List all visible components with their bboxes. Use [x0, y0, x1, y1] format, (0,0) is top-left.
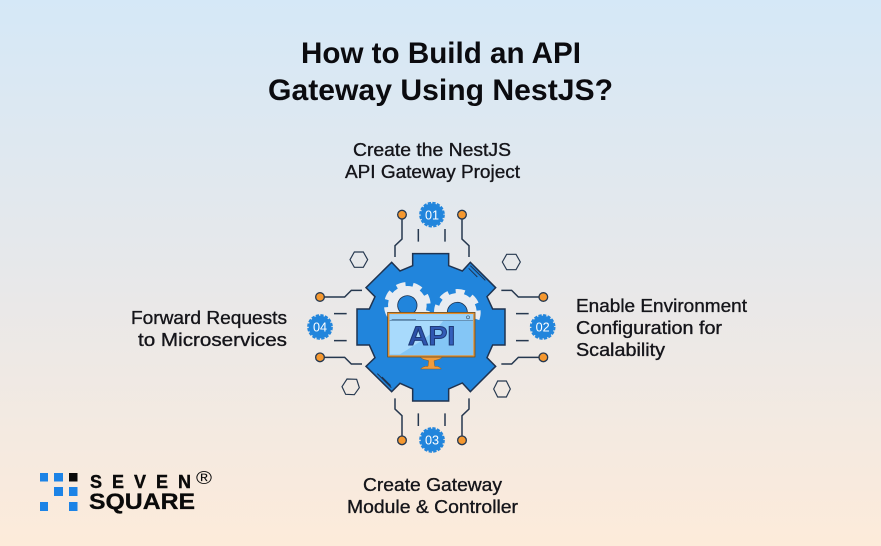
small gear right: [435, 290, 480, 335]
step 04 label: [131, 308, 287, 350]
step 02 label: Configuration for: [576, 318, 722, 338]
orange nodes: [316, 210, 548, 445]
gear: [357, 254, 505, 401]
logo squares: [40, 473, 78, 511]
badge 03: 03: [425, 434, 439, 448]
badge 02: [531, 315, 555, 339]
monitor screen highlight: [390, 321, 443, 354]
badge 01: [420, 203, 444, 227]
step 04 label: Forward Requests: [131, 308, 287, 328]
circuit lines: [320, 215, 543, 440]
step 01 label: API Gateway Project: [345, 162, 520, 182]
step 03 label: [347, 475, 518, 517]
monitor browser bar: [390, 314, 473, 320]
monitor stand: [420, 357, 443, 369]
badge 04: [308, 315, 332, 339]
step 01 label: [345, 140, 520, 182]
step 02 label: Scalability: [576, 340, 665, 360]
badge 02: 02: [536, 321, 550, 335]
logo: [40, 468, 212, 514]
small gear left: [382, 280, 433, 331]
step 03 label: Create Gateway: [363, 475, 502, 495]
logo wordmark: SEVEN: [90, 472, 191, 492]
step 02 label: [576, 296, 747, 360]
logo: ®: [196, 468, 212, 488]
step 01 label: Create the NestJS: [353, 140, 511, 160]
logo: SQUARE: [89, 489, 195, 514]
badge 04: 04: [313, 321, 327, 335]
step 03 label: Module & Controller: [347, 497, 518, 517]
gear highlights: [377, 266, 485, 388]
monitor: [388, 313, 474, 356]
step 04 label: to Microservices: [138, 330, 287, 350]
hexagons: [342, 252, 520, 397]
badge 01: 01: [425, 208, 439, 222]
title: [268, 37, 613, 107]
title: How to Build an API: [301, 37, 581, 70]
badge 03: [420, 428, 444, 452]
step 02 label: Enable Environment: [576, 296, 747, 316]
central diagram: [308, 203, 555, 452]
API text: API: [408, 321, 455, 351]
title: Gateway Using NestJS?: [268, 74, 613, 107]
